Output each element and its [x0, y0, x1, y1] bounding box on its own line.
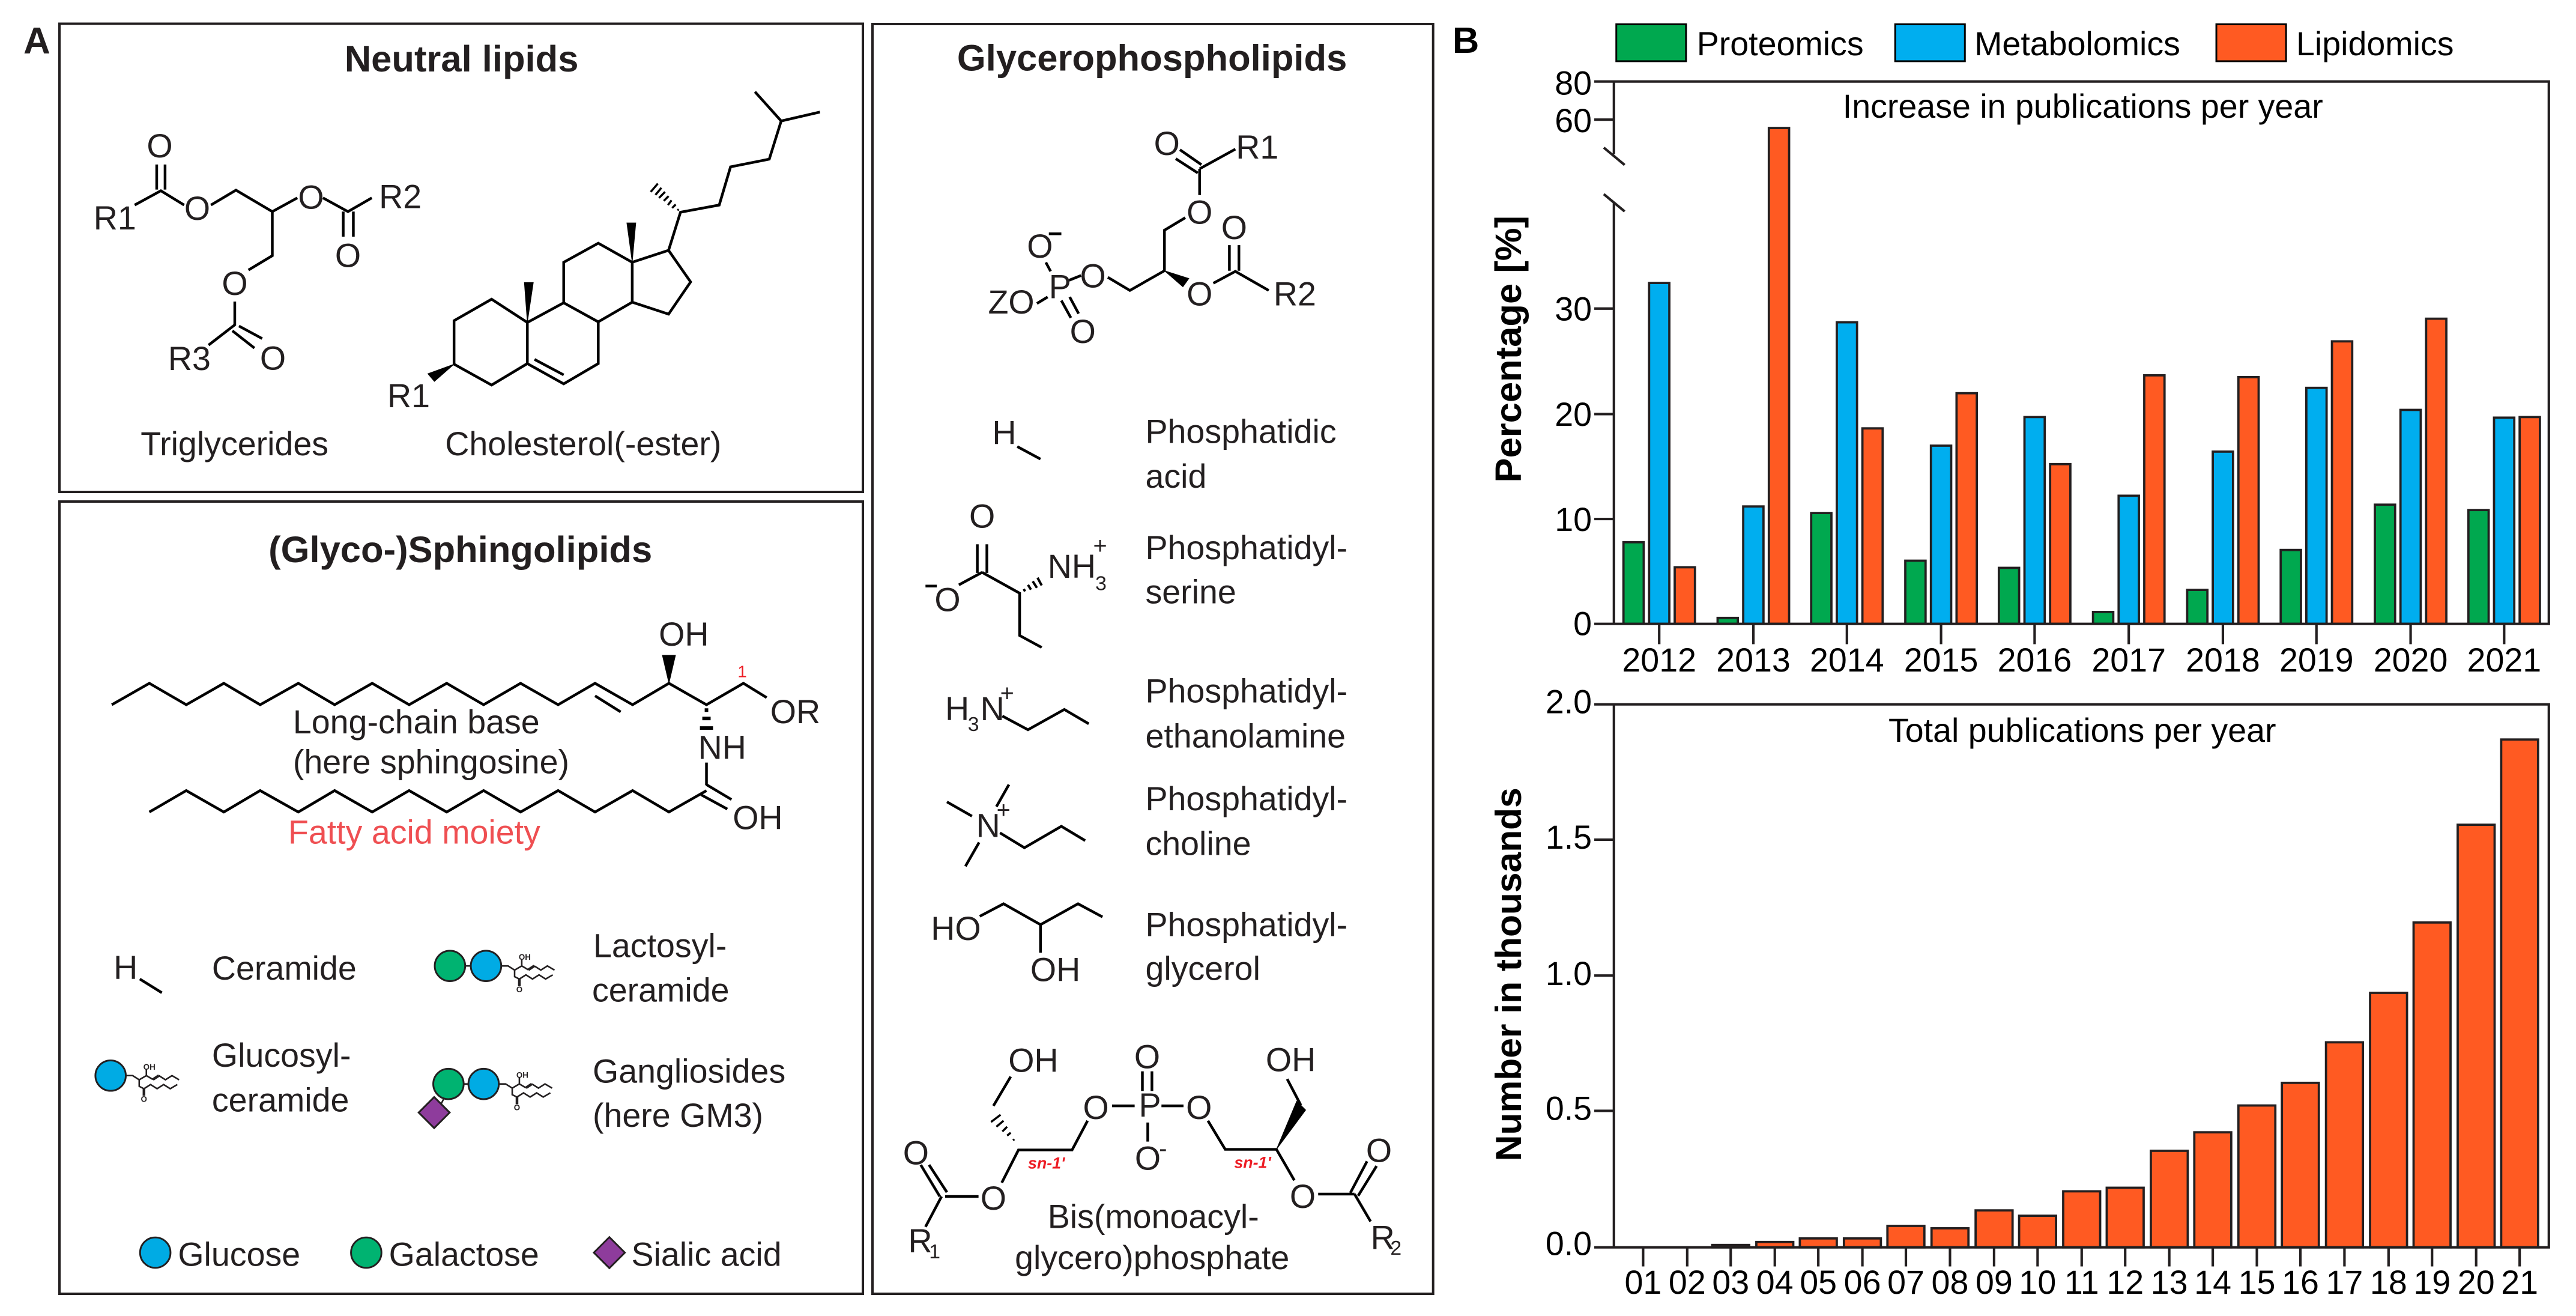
y axis title: Percentage [%] — [1488, 216, 1529, 482]
entry: phosphatidic acid — [992, 413, 1337, 495]
y tick labels — [1555, 64, 1592, 643]
entry: ceramide — [113, 949, 357, 993]
entry: phosphatidylglycerol: HO — [931, 910, 981, 947]
entry: phosphatidylglycerol: glycerol — [1145, 950, 1260, 987]
entry: phosphatidylserine: Phosphatidyl- — [1145, 529, 1347, 566]
entry: phosphatidylserine: O — [934, 581, 961, 618]
structure: glycerophospholipid head: P — [1049, 268, 1071, 305]
structure: bis(monoacylglycero)phosphate: O — [1083, 1089, 1109, 1126]
entry: phosphatidylcholine — [947, 780, 1347, 866]
entry: phosphatidylglycerol — [931, 904, 1347, 989]
structure: ceramide backbone: OH — [733, 799, 783, 837]
x tick labels: 20 — [2458, 1264, 2495, 1301]
entry: glucosylceramide — [95, 1037, 351, 1118]
entry: phosphatidylglycerol: OH — [1030, 951, 1080, 989]
structure: triglyceride: R1 — [94, 199, 136, 237]
x tick labels: 15 — [2239, 1264, 2275, 1301]
structure: triglyceride: O — [222, 265, 248, 302]
x tick labels: 2015 — [1904, 641, 1978, 679]
entry: phosphatidylcholine: + — [997, 797, 1011, 823]
structure: bis(monoacylglycero)phosphate: R — [909, 1222, 933, 1260]
legend: sugars: Glucose — [178, 1236, 300, 1273]
label: cholesterol ester: Cholesterol(-ester) — [445, 425, 721, 462]
x tick labels: 19 — [2413, 1264, 2451, 1301]
x tick labels: 08 — [1932, 1264, 1968, 1301]
structure: ceramide backbone: OH — [659, 616, 709, 653]
entry: phosphatidylserine: serine — [1145, 573, 1236, 610]
bars — [1624, 128, 2540, 624]
structure: bis(monoacylglycero)phosphate: O — [1186, 1089, 1212, 1126]
structure: triglyceride: R2 — [379, 178, 422, 215]
axes — [1594, 705, 2549, 1266]
structure: bis(monoacylglycero)phosphate: sn-1' — [1234, 1153, 1272, 1171]
x tick labels: 10 — [2019, 1264, 2056, 1301]
x tick labels: 02 — [1669, 1264, 1706, 1301]
entry: gangliosides: OH — [516, 1071, 528, 1080]
entry: gangliosides — [419, 1053, 785, 1134]
entry: glucosylceramide: OH — [144, 1063, 156, 1072]
x tick labels: 12 — [2106, 1264, 2144, 1301]
contents: sphingolipid classes — [95, 927, 785, 1273]
x tick labels: 07 — [1887, 1264, 1924, 1301]
legend: sugars: Sialic acid — [632, 1236, 782, 1273]
entry: phosphatidylserine — [925, 497, 1347, 647]
entry: lactosylceramide: ceramide — [592, 972, 730, 1009]
chart title: Increase in publications per year — [1843, 88, 2323, 125]
y tick labels: 10 — [1555, 501, 1592, 538]
panel: glycerophospholipids — [872, 24, 1433, 1294]
x tick labels: 06 — [1844, 1264, 1881, 1301]
y tick labels — [1546, 684, 1592, 1263]
structure: glycerophospholipid head: R1 — [1236, 129, 1278, 166]
x tick labels: 17 — [2326, 1264, 2363, 1301]
structure: bis(monoacylglycero)phosphate: O — [1366, 1132, 1392, 1169]
structure: triglyceride: O — [260, 339, 286, 377]
entry: ceramide: Ceramide — [212, 950, 357, 987]
label: sphingosine: (here sphingosine) — [293, 743, 569, 780]
y tick labels: 60 — [1555, 102, 1592, 139]
entry: ceramide: H — [113, 949, 138, 986]
structure: bis(monoacylglycero)phosphate: O — [981, 1180, 1006, 1217]
y tick labels: 80 — [1555, 64, 1592, 102]
chart: increase in publications per year — [1488, 64, 2549, 679]
structure: glycerophospholipid head: O — [1154, 125, 1180, 162]
x tick labels: 09 — [1976, 1264, 2013, 1301]
heading: glycerophospholipids: Glycerophospholipids — [957, 37, 1347, 79]
entry: phosphatidylethanolamine: H — [945, 690, 969, 727]
x tick labels: 04 — [1756, 1264, 1794, 1301]
panel: glyco-sphingolipids — [59, 502, 863, 1294]
entry: phosphatidylethanolamine: N — [981, 690, 1005, 727]
heading: sphingolipids: (Glyco-)Sphingolipids — [268, 529, 652, 571]
x tick labels: 03 — [1712, 1264, 1749, 1301]
entry: gangliosides: Gangliosides — [593, 1053, 785, 1090]
entry: phosphatidic acid: Phosphatidic — [1145, 413, 1337, 450]
chart: total publications per year — [1488, 684, 2549, 1301]
entry: phosphatidylserine: O — [969, 497, 995, 535]
structure: bis(monoacylglycero)phosphate: P — [1139, 1087, 1161, 1124]
y tick labels: 0.5 — [1546, 1090, 1592, 1127]
entry: phosphatidylcholine: Phosphatidyl- — [1145, 780, 1347, 817]
label: fatty acid moiety: Fatty acid moiety — [288, 814, 540, 851]
entry: phosphatidylcholine: choline — [1145, 825, 1251, 862]
structure: bis(monoacylglycero)phosphate: O — [903, 1134, 929, 1171]
entry: glucosylceramide: O — [141, 1094, 147, 1103]
entry: phosphatidylethanolamine — [945, 672, 1347, 755]
entry: phosphatidylserine: NH — [1048, 548, 1096, 585]
structure: glycerophospholipid head: O — [1070, 313, 1096, 350]
entry: phosphatidic acid: H — [992, 414, 1017, 452]
structure: triglyceride — [94, 127, 422, 377]
structure: glycerophospholipid head: O — [1221, 209, 1247, 246]
entry: glucosylceramide: ceramide — [212, 1081, 349, 1118]
y tick labels: 0.0 — [1546, 1225, 1592, 1263]
entry: phosphatidylethanolamine: 3 — [968, 713, 979, 736]
label: BMP: Bis(monoacyl- — [1048, 1198, 1259, 1236]
structure: glycerophospholipid head: O — [1187, 275, 1212, 312]
y tick labels: 1.0 — [1546, 955, 1592, 992]
structure: glycerophospholipid head: O — [1027, 228, 1053, 265]
structure: cholesterol: R1 — [387, 377, 430, 414]
structure: triglyceride: O — [298, 178, 324, 216]
y tick labels: 2.0 — [1546, 684, 1592, 721]
structure: bis(monoacylglycero)phosphate: OH — [1008, 1042, 1059, 1079]
entry: gangliosides: (here GM3) — [593, 1097, 763, 1134]
structure: bis(monoacylglycero)phosphate: O — [1135, 1139, 1161, 1177]
entry: lactosylceramide: O — [516, 985, 522, 994]
x tick labels: 2020 — [2374, 641, 2448, 679]
structure: bis(monoacylglycero)phosphate: R — [1371, 1219, 1395, 1256]
bars — [1713, 739, 2538, 1248]
axes — [1594, 82, 2549, 644]
legend: sugars — [140, 1236, 782, 1273]
structure: ceramide backbone: OR — [770, 693, 820, 730]
structure: glycerophospholipid head: O — [1187, 193, 1212, 231]
x tick labels: 2013 — [1716, 641, 1791, 679]
y tick labels: 20 — [1555, 396, 1592, 433]
structure: glycerophospholipid head: O — [1080, 258, 1106, 295]
x tick labels: 2012 — [1622, 641, 1696, 679]
x tick labels: 2018 — [2186, 641, 2260, 679]
structure: triglyceride: O — [184, 190, 210, 227]
legend: omics — [1616, 24, 2454, 62]
entry: phosphatidylethanolamine: ethanolamine — [1145, 718, 1346, 755]
label: triglycerides: Triglycerides — [141, 425, 328, 462]
x tick labels: 18 — [2370, 1264, 2407, 1301]
entry: phosphatidylserine: 3 — [1095, 572, 1107, 595]
label: BMP second line: glycero)phosphate — [1015, 1239, 1289, 1276]
entry: lactosylceramide: OH — [519, 953, 531, 962]
structure: bis(monoacylglycero)phosphate: - — [1159, 1135, 1167, 1162]
structure: glycerophospholipid head: ZO — [988, 284, 1035, 321]
heading: neutral lipids: Neutral lipids — [345, 38, 578, 80]
x tick labels: 16 — [2282, 1264, 2319, 1301]
x tick labels — [1622, 641, 2541, 679]
legend: sugars: Galactose — [389, 1236, 539, 1273]
label: long-chain base: Long-chain base — [293, 703, 540, 741]
structure: glycerophospholipid head — [988, 125, 1316, 350]
legend: omics: Metabolomics — [1974, 25, 2180, 62]
structure: cholesterol — [387, 92, 820, 414]
chart title: Total publications per year — [1888, 712, 2276, 749]
y axis title: Number in thousands — [1488, 787, 1529, 1161]
entry: phosphatidylserine: + — [1093, 533, 1107, 559]
contents: sphingolipid backbone — [112, 529, 820, 851]
structure: bis(monoacylglycero)phosphate — [903, 1039, 1401, 1263]
structure: bis(monoacylglycero)phosphate: OH — [1266, 1042, 1316, 1079]
x tick labels: 21 — [2501, 1264, 2538, 1301]
x tick labels: 13 — [2151, 1264, 2188, 1301]
contents: neutral lipids — [94, 38, 820, 462]
x tick labels: 2016 — [1998, 641, 2072, 679]
panel: neutral lipids — [59, 24, 863, 492]
entry: phosphatidylglycerol: Phosphatidyl- — [1145, 906, 1347, 943]
entry: phosphatidic acid: acid — [1145, 458, 1206, 495]
x tick labels — [1625, 1264, 2538, 1301]
structure: bis(monoacylglycero)phosphate: sn-1' — [1028, 1154, 1066, 1172]
x tick labels: 01 — [1625, 1264, 1661, 1301]
structure: triglyceride: O — [147, 127, 173, 165]
structure: ceramide backbone: 1 — [737, 663, 747, 681]
entry: phosphatidylethanolamine: Phosphatidyl- — [1145, 672, 1347, 709]
legend: omics: Lipidomics — [2296, 25, 2454, 62]
structure: triglyceride: O — [335, 237, 361, 274]
entry: gangliosides: O — [514, 1103, 520, 1112]
panel label B: B — [1453, 20, 1479, 61]
contents: lower headgroups — [903, 672, 1401, 1276]
contents: upper headgroups — [925, 37, 1347, 647]
legend: omics: Proteomics — [1697, 25, 1864, 62]
structure: ceramide backbone: NH — [698, 729, 746, 766]
entry: lactosylceramide — [435, 927, 730, 1009]
entry: glucosylceramide: Glucosyl- — [212, 1037, 351, 1074]
structure: bis(monoacylglycero)phosphate: 2 — [1390, 1237, 1401, 1260]
y tick labels: 1.5 — [1546, 819, 1592, 856]
x tick labels: 14 — [2194, 1264, 2231, 1301]
entry: phosphatidylcholine: N — [976, 807, 1000, 844]
structure: triglyceride: R3 — [168, 340, 211, 377]
panel label A: A — [23, 20, 50, 62]
x tick labels: 2019 — [2279, 641, 2354, 679]
y tick labels: 0 — [1573, 605, 1592, 643]
structure: bis(monoacylglycero)phosphate: O — [1290, 1178, 1316, 1215]
structure: ceramide backbone — [112, 616, 820, 837]
structure: bis(monoacylglycero)phosphate: 1 — [929, 1240, 940, 1263]
x tick labels: 2017 — [2091, 641, 2166, 679]
x tick labels: 05 — [1800, 1264, 1837, 1301]
x tick labels: 2014 — [1810, 641, 1884, 679]
y tick labels: 30 — [1555, 291, 1592, 328]
structure: glycerophospholipid head: R2 — [1274, 275, 1316, 312]
entry: phosphatidylethanolamine: + — [1000, 680, 1014, 706]
x tick labels: 2021 — [2467, 641, 2541, 679]
entry: lactosylceramide: Lactosyl- — [593, 927, 727, 964]
structure: bis(monoacylglycero)phosphate: O — [1134, 1039, 1160, 1076]
x tick labels: 11 — [2064, 1264, 2099, 1301]
panel B: top chart and legend — [1453, 20, 2549, 679]
